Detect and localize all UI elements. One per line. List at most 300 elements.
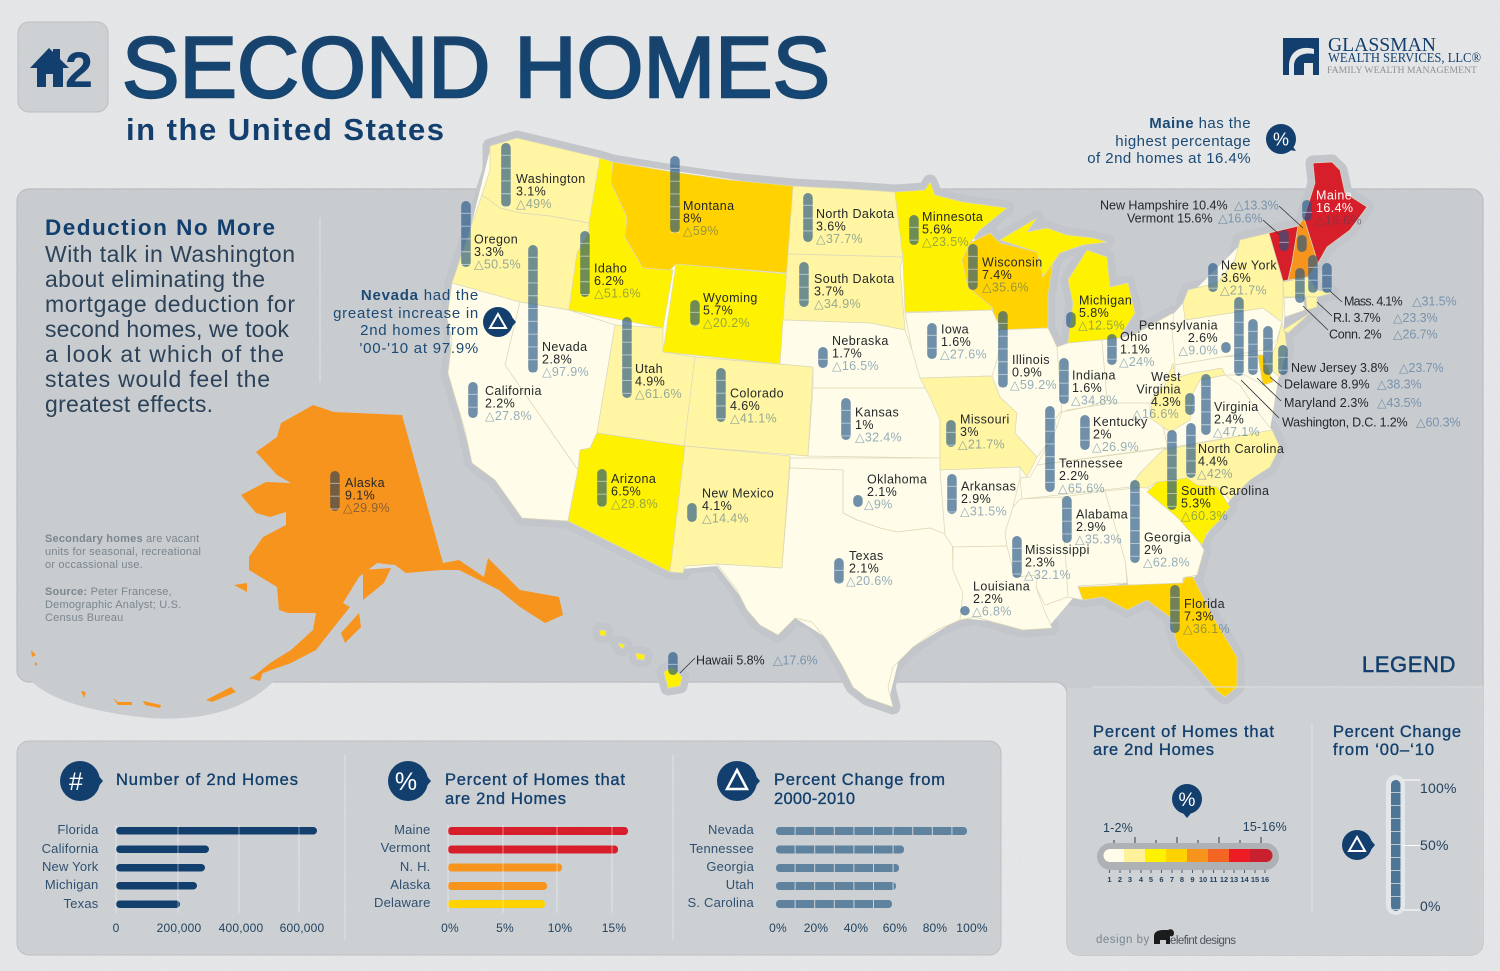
state label: Nevada: Nevada <box>542 340 588 354</box>
state label: Hawaii <box>668 652 817 675</box>
state label: Texas: △20.6% <box>846 574 893 588</box>
state label: Arkansas <box>947 474 1016 518</box>
state label: South Carolina: △60.3% <box>1181 509 1228 523</box>
state label: South Dakota <box>799 262 895 311</box>
text block: Deduction No More: second homes, we took <box>45 316 290 342</box>
chart: percent change 2000-2010: 60% <box>883 921 907 935</box>
chart: number of 2nd homes: Number of 2nd Homes <box>116 771 298 789</box>
state label: Kansas <box>841 398 902 444</box>
state label: Colorado: Colorado <box>730 386 784 400</box>
state label: Kentucky: Kentucky <box>1093 415 1148 429</box>
state label: Utah: 4.9% <box>635 374 665 388</box>
state label: Illinois: Illinois <box>1012 353 1050 367</box>
state label: West Virginia: Virginia <box>1136 382 1181 396</box>
map: land backing <box>450 150 1285 695</box>
state label: South Dakota: △34.9% <box>814 297 861 311</box>
state label: Maine: △16.6% <box>1315 213 1362 227</box>
chart: number of 2nd homes: Michigan <box>45 877 98 892</box>
state label: Maine: Maine <box>1316 188 1352 202</box>
state label: Nebraska: Nebraska <box>832 334 889 348</box>
state label: Oklahoma <box>853 472 927 511</box>
state label: Utah <box>622 317 682 401</box>
legend: percent of homes scale: 1-2% <box>1103 821 1133 835</box>
chart: percent change 2000-2010: Percent Change from <box>774 771 945 789</box>
state label: Rhode Island: R.I. 3.7% <box>1333 311 1381 325</box>
text block: Deduction No More: states would feel the <box>45 366 270 392</box>
state label: Washington: 3.1% <box>516 184 546 198</box>
icon: delta <box>717 761 760 801</box>
state label: Nebraska: 1.7% <box>832 346 862 360</box>
text block: definition and source: or occassional use. <box>45 559 143 571</box>
icon: percent <box>1172 784 1202 818</box>
map: contiguous United States and Hawaii <box>447 138 1367 707</box>
state label: Virginia: 2.4% <box>1214 412 1244 426</box>
state label: Kentucky: 2% <box>1093 427 1112 441</box>
subtitle: in the United States <box>126 112 444 147</box>
state label: Pennsylvania: 2.6% <box>1188 331 1218 345</box>
state label: Ohio: Ohio <box>1120 330 1148 344</box>
state label: Texas: 2.1% <box>849 561 879 575</box>
callout: Maine highest percentage: highest percentage <box>1115 133 1251 150</box>
state label: Nevada: △97.9% <box>542 365 589 379</box>
legend: percent of homes scale: 7 <box>1170 875 1174 884</box>
state label: Kansas: 1% <box>855 418 874 432</box>
legend: percent of homes scale: 4 <box>1139 875 1144 884</box>
panel: legend lower area <box>1067 688 1483 955</box>
chart: percent of homes that are 2nd homes: 15% <box>602 921 626 935</box>
state label: Minnesota <box>909 210 983 249</box>
chart: percent change 2000-2010: Utah <box>726 877 754 892</box>
icon: delta <box>1342 830 1375 860</box>
state label: Washington: △49% <box>516 197 552 211</box>
state label: Indiana: △34.8% <box>1071 393 1118 407</box>
state label: Alabama: △35.3% <box>1075 532 1122 546</box>
state label: Georgia: △62.8% <box>1143 555 1190 569</box>
icon: number sign: # <box>69 768 83 796</box>
logo: Glassman Wealth Services: FAMILY WEALTH MANAGEMENT <box>1327 66 1477 76</box>
state label: Minnesota: Minnesota <box>922 210 983 224</box>
text block: Deduction No More <box>45 215 295 417</box>
state label: Arizona: △29.8% <box>611 497 658 511</box>
state label: New York: 3.6% <box>1221 271 1251 285</box>
state label: Oklahoma: Oklahoma <box>867 472 927 486</box>
state label: Wisconsin: △35.6% <box>982 280 1029 294</box>
credit: design by elefint designs: elefint designs <box>1170 935 1236 947</box>
state label: Colorado: △41.1% <box>730 411 777 425</box>
state label: California <box>468 382 542 423</box>
state label: Louisiana: Louisiana <box>973 580 1030 594</box>
state label: Nevada: 2.8% <box>542 352 572 366</box>
chart: number of 2nd homes: 600,000 <box>280 921 325 935</box>
state label: North Dakota: △37.7% <box>816 232 863 246</box>
chart: number of 2nd homes: 0 <box>113 921 120 935</box>
state label: Missouri: 3% <box>960 425 979 439</box>
state label: Nebraska <box>818 334 889 373</box>
legend: percent of homes scale: 8 <box>1180 875 1184 884</box>
legend: percent change scale: 100% <box>1420 780 1457 796</box>
state label: Idaho: 6.2% <box>594 274 624 288</box>
state label: South Dakota: 3.7% <box>814 284 844 298</box>
state label: South Carolina: 5.3% <box>1181 496 1211 510</box>
state label: New Mexico: New Mexico <box>702 486 774 500</box>
state label: Oregon: △50.5% <box>474 257 521 271</box>
state label: Michigan: 5.8% <box>1079 306 1109 320</box>
callout: Nevada greatest increase: greatest increase in <box>333 305 479 322</box>
state label: Idaho: Idaho <box>594 262 627 276</box>
legend: percent of homes scale: 14 <box>1240 875 1249 884</box>
state label: Washington: Washington <box>516 172 586 186</box>
legend: percent of homes scale: 15 <box>1251 875 1259 884</box>
chart: percent of homes that are 2nd homes: 5% <box>496 921 514 935</box>
state label: Delaware: △38.3% <box>1377 378 1421 392</box>
state label: Georgia: 2% <box>1144 543 1163 557</box>
state label: Montana <box>670 156 734 238</box>
logo: Glassman Wealth Services: GLASSMAN <box>1328 35 1436 56</box>
logo: Glassman Wealth Services <box>1283 35 1481 76</box>
state label: North Carolina: 4.4% <box>1198 454 1228 468</box>
state label: South Carolina: South Carolina <box>1181 484 1269 498</box>
state label: Missouri: Missouri <box>960 412 1010 426</box>
state label: New Jersey: △23.7% <box>1399 361 1443 375</box>
callout: Maine highest percentage: % <box>1273 130 1289 150</box>
legend: percent of homes scale: are 2nd Homes <box>1093 741 1214 759</box>
state label: Minnesota: △23.5% <box>922 235 969 249</box>
state label: California: △27.8% <box>485 409 532 423</box>
state label: North Carolina: North Carolina <box>1198 442 1284 456</box>
callout: Nevada greatest increase: '00-'10 at 97.9% <box>360 340 479 357</box>
legend: percent of homes scale: 2 <box>1118 875 1122 884</box>
state label: Vermont <box>1127 212 1289 251</box>
state label: Alabama: 2.9% <box>1076 520 1106 534</box>
state label: Wyoming <box>690 291 758 330</box>
text block: definition and source: Source: Peter Francese, <box>45 586 172 598</box>
logo: Glassman Wealth Services: WEALTH SERVICES, LLC® <box>1328 50 1481 65</box>
legend: percent of homes scale: 5 <box>1149 875 1153 884</box>
state label: Alaska: △29.9% <box>343 501 390 515</box>
state label: Montana: △59% <box>683 224 719 238</box>
text block: Deduction No More: Deduction No More <box>45 215 275 240</box>
state label: Missouri <box>946 412 1010 451</box>
state label: Wyoming: △20.2% <box>703 316 750 330</box>
state label: Florida: △36.1% <box>1183 622 1230 636</box>
state label: Utah: Utah <box>635 362 663 376</box>
legend: percent of homes scale: Percent of Homes that <box>1093 723 1274 741</box>
state label: Oklahoma: 2.1% <box>867 485 897 499</box>
state label: Arkansas: △31.5% <box>960 504 1007 518</box>
state label: Wyoming: 5.7% <box>703 303 733 317</box>
state label: Massachusetts <box>1308 255 1456 308</box>
state label: Iowa: Iowa <box>941 322 969 336</box>
state label: Florida <box>1170 585 1230 636</box>
state label: Tennessee <box>1045 406 1123 495</box>
state label: Washington D.C. <box>1234 297 1460 430</box>
icon: percent: % <box>1179 790 1196 811</box>
text block: Deduction No More: With talk in Washington <box>45 241 295 267</box>
icon: house with number two: 2 <box>65 42 93 98</box>
state label: Arizona: 6.5% <box>611 484 641 498</box>
state label: Montana: Montana <box>683 199 734 213</box>
callout: Maine highest percentage: Maine has the <box>1149 115 1251 132</box>
state label: California: 2.2% <box>485 396 515 410</box>
state label: Rhode Island <box>1317 263 1437 325</box>
state label: Utah: △61.6% <box>635 387 682 401</box>
state label: Nevada <box>528 245 589 379</box>
state label: Texas <box>834 549 893 588</box>
state label: Maine <box>1302 188 1362 227</box>
chart: percent of homes that are 2nd homes: Alaska <box>390 877 431 892</box>
state label: Oregon: Oregon <box>474 232 518 246</box>
state label: Tennessee: Tennessee <box>1059 456 1123 470</box>
callout: Nevada greatest increase: 2nd homes from <box>360 322 479 339</box>
state label: Indiana: Indiana <box>1072 368 1116 382</box>
state label: Massachusetts: Mass. 4.1% <box>1344 294 1403 308</box>
state label: Pennsylvania: △9.0% <box>1178 343 1218 357</box>
state label: Alaska <box>330 471 390 515</box>
state label: South Dakota: South Dakota <box>814 272 895 286</box>
state label: West Virginia: 4.3% <box>1151 395 1181 409</box>
chart: number of 2nd homes: New York <box>42 859 99 874</box>
state label: Rhode Island: △23.3% <box>1393 311 1437 325</box>
chart: percent of homes that are 2nd homes: N. H. <box>400 859 430 874</box>
state label: Arkansas: Arkansas <box>961 480 1016 494</box>
title: SECOND HOMES <box>122 20 830 116</box>
state label: Virginia: Virginia <box>1214 400 1259 414</box>
callout: Maine highest percentage: of 2nd homes at 16.4% <box>1087 150 1251 167</box>
chart: percent of homes that are 2nd homes: 0% <box>441 921 459 935</box>
state label: Iowa: 1.6% <box>941 335 971 349</box>
state label: Arizona: Arizona <box>611 472 656 486</box>
legend heading: LEGEND <box>1362 652 1456 677</box>
state label: Delaware <box>1263 326 1421 392</box>
legend: percent of homes scale: 10 <box>1199 875 1207 884</box>
text block: definition and source: units for seasonal, recreational <box>45 546 201 558</box>
text block: definition and source: Demographic Analyst; U.S. <box>45 599 181 611</box>
state label: West Virginia <box>1132 370 1195 421</box>
state label: Connecticut: Conn. 2% <box>1329 328 1382 342</box>
chart: percent change 2000-2010 <box>687 761 988 935</box>
state label: Hawaii: Hawaii 5.8% <box>696 654 765 668</box>
callout: Nevada greatest increase: Nevada had the <box>361 287 479 304</box>
state label: Mississippi <box>1012 536 1090 582</box>
state label: North Carolina: △42% <box>1197 467 1233 481</box>
text block: Deduction No More: mortgage deduction for <box>45 291 295 317</box>
chart: percent of homes that are 2nd homes <box>374 761 628 935</box>
state label: Alabama <box>1062 496 1128 546</box>
text block: Deduction No More: about eliminating the <box>45 266 265 292</box>
state label: Illinois <box>998 311 1057 392</box>
state label: New York: △21.7% <box>1220 283 1267 297</box>
state label: Connecticut <box>1295 268 1437 342</box>
state label: New Jersey <box>1278 345 1443 375</box>
state label: North Dakota <box>803 193 894 246</box>
chart: percent change 2000-2010: 2000-2010 <box>774 790 855 808</box>
credit: design by elefint designs <box>1096 929 1236 947</box>
legend: percent change scale: 50% <box>1420 837 1449 853</box>
state label: Virginia <box>1201 374 1260 439</box>
legend: percent of homes scale: 16 <box>1261 875 1269 884</box>
legend: percent of homes scale <box>1093 723 1287 884</box>
state label: California: California <box>485 384 542 398</box>
state label: Virginia: △47.1% <box>1213 425 1260 439</box>
state label: Illinois: △59.2% <box>1010 378 1057 392</box>
text block: definition and source <box>45 533 201 624</box>
chart: percent of homes that are 2nd homes: are 2nd Homes <box>445 790 566 808</box>
state label: Wisconsin: 7.4% <box>982 268 1012 282</box>
state label: Kentucky <box>1080 415 1148 454</box>
state label: Texas: Texas <box>849 549 884 563</box>
state label: Tennessee: 2.2% <box>1059 469 1089 483</box>
state label: Alabama: Alabama <box>1076 508 1128 522</box>
chart: number of 2nd homes: Florida <box>57 822 99 837</box>
chart: percent change 2000-2010: S. Carolina <box>687 895 755 910</box>
legend: percent change scale <box>1333 723 1461 915</box>
chart: number of 2nd homes: 400,000 <box>219 921 264 935</box>
state label: Iowa <box>927 322 987 361</box>
state label: Washington <box>501 143 586 211</box>
legend: percent of homes scale: 13 <box>1230 875 1238 884</box>
state label: Massachusetts: △31.5% <box>1412 294 1456 308</box>
state label: New Jersey: New Jersey 3.8% <box>1291 361 1389 375</box>
chart: percent change 2000-2010: Tennessee <box>689 841 754 856</box>
state label: Wisconsin <box>968 244 1043 294</box>
state label: Illinois: 0.9% <box>1012 365 1042 379</box>
state label: Mississippi: 2.3% <box>1025 555 1055 569</box>
chart: percent change 2000-2010: 100% <box>956 921 988 935</box>
legend: percent change scale: 0% <box>1420 898 1441 914</box>
state label: Missouri: △21.7% <box>958 437 1005 451</box>
state label: Georgia <box>1130 480 1191 569</box>
state label: Hawaii: △17.6% <box>773 654 817 668</box>
state label: West Virginia: West <box>1151 370 1181 384</box>
chart: number of 2nd homes: California <box>42 841 99 856</box>
state label: Minnesota: 5.6% <box>922 222 952 236</box>
text block: Deduction No More: a look at which of the <box>45 341 284 367</box>
icon: percent: % <box>395 768 417 796</box>
text block: Deduction No More: greatest effects. <box>45 391 213 417</box>
state label: Idaho: △51.6% <box>594 286 641 300</box>
state label: Louisiana: 2.2% <box>973 592 1003 606</box>
state label: Indiana: 1.6% <box>1072 381 1102 395</box>
state label: Washington D.C.: Washington, D.C. 1.2% <box>1282 416 1408 430</box>
chart: percent of homes that are 2nd homes: Vermont <box>381 840 431 855</box>
state label: Florida: 7.3% <box>1184 609 1214 623</box>
state label: New Mexico: 4.1% <box>702 499 732 513</box>
state label: Montana: 8% <box>683 211 702 225</box>
state label: Ohio: △24% <box>1119 355 1155 369</box>
callout: Nevada greatest increase <box>333 287 516 357</box>
state label: Oregon: 3.3% <box>474 245 504 259</box>
legend: percent of homes scale: 11 <box>1210 875 1217 884</box>
state label: Ohio <box>1107 330 1155 369</box>
state label: South Carolina <box>1167 430 1269 523</box>
chart: percent change 2000-2010: 40% <box>844 921 868 935</box>
state label: Tennessee: △65.6% <box>1058 481 1105 495</box>
map halo: land outline <box>447 138 1367 707</box>
state label: Michigan <box>1066 294 1132 332</box>
state label: Pennsylvania: Pennsylvania <box>1139 318 1218 332</box>
state label: Pennsylvania <box>1139 318 1231 357</box>
state label: Connecticut: △26.7% <box>1393 328 1437 342</box>
state label: Oklahoma: △9% <box>864 497 893 511</box>
callout: Maine highest percentage <box>1087 115 1296 167</box>
state label: Maryland: △43.5% <box>1377 396 1421 410</box>
map halo: Aleutian islands backing <box>30 680 275 719</box>
state label: Louisiana <box>960 580 1030 618</box>
legend: percent of homes scale: 3 <box>1128 875 1132 884</box>
state label: Vermont: Vermont 15.6% <box>1127 212 1213 226</box>
state label: Arkansas: 2.9% <box>961 492 991 506</box>
state label: New Hampshire: △13.3% <box>1234 198 1278 212</box>
state label: New Mexico: △14.4% <box>702 511 749 525</box>
panel: bottom charts <box>17 741 1001 955</box>
state label: Delaware: Delaware 8.9% <box>1284 378 1370 392</box>
chart: percent change 2000-2010: Nevada <box>708 822 755 837</box>
legend: percent of homes scale: 15-16% <box>1243 820 1287 834</box>
state label: Maryland: Maryland 2.3% <box>1284 396 1369 410</box>
state label: Kentucky: △26.9% <box>1092 440 1139 454</box>
text block: definition and source: Census Bureau <box>45 612 123 624</box>
state label: North Carolina <box>1186 423 1284 481</box>
state label: North Dakota: 3.6% <box>816 219 846 233</box>
chart: percent change 2000-2010: 0% <box>769 921 787 935</box>
state label: Mississippi: Mississippi <box>1025 543 1090 557</box>
state label: Kansas: Kansas <box>855 406 899 420</box>
legend: percent change scale: from ‘00–‘10 <box>1333 741 1434 759</box>
state label: New York: New York <box>1221 258 1277 272</box>
state label: Ohio: 1.1% <box>1120 342 1150 356</box>
map: Alaska <box>31 405 563 708</box>
legend: percent change scale: Percent Change <box>1333 723 1461 741</box>
icon: house with number two <box>18 22 108 112</box>
state label: Indiana <box>1059 358 1118 407</box>
state label: Arizona <box>597 469 658 511</box>
state label: Michigan: △12.5% <box>1078 318 1125 332</box>
state label: North Dakota: North Dakota <box>816 207 894 221</box>
state label: Alaska: Alaska <box>345 476 385 490</box>
legend: percent of homes scale: 1 <box>1107 875 1112 884</box>
chart: percent of homes that are 2nd homes: Maine <box>394 822 430 837</box>
state label: Maryland <box>1248 319 1421 410</box>
state label: Michigan: Michigan <box>1079 294 1132 308</box>
state label: Alaska: 9.1% <box>345 488 375 502</box>
state label: Florida: Florida <box>1184 597 1225 611</box>
state label: Maine: 16.4% <box>1316 201 1353 215</box>
state label: Wyoming: Wyoming <box>703 291 758 305</box>
state label: New Hampshire: New Hampshire 10.4% <box>1100 198 1228 212</box>
state label: New Mexico <box>687 486 774 525</box>
legend: percent of homes scale: 12 <box>1220 875 1228 884</box>
state label: Wisconsin: Wisconsin <box>982 256 1043 270</box>
legend: percent of homes scale: 9 <box>1190 875 1195 884</box>
state label: Vermont: △16.6% <box>1218 212 1262 226</box>
text block: definition and source: Secondary homes are vacant <box>45 533 199 545</box>
icon: number sign <box>60 761 103 801</box>
chart: number of 2nd homes <box>42 761 325 935</box>
state label: New Hampshire <box>1100 198 1307 252</box>
chart: percent change 2000-2010: 20% <box>804 921 828 935</box>
chart: percent of homes that are 2nd homes: Delaware <box>374 895 430 910</box>
state label: Oregon <box>461 201 521 271</box>
chart: percent of homes that are 2nd homes: 10% <box>548 921 572 935</box>
state label: Georgia: Georgia <box>1144 530 1191 544</box>
icon: percent <box>388 761 431 801</box>
chart: percent change 2000-2010: Georgia <box>706 859 755 874</box>
state label: Colorado: 4.6% <box>730 399 760 413</box>
state label: West Virginia: △16.6% <box>1132 407 1179 421</box>
state label: Kansas: △32.4% <box>855 430 902 444</box>
state label: Iowa: △27.6% <box>940 347 987 361</box>
state label: New York <box>1208 258 1277 297</box>
